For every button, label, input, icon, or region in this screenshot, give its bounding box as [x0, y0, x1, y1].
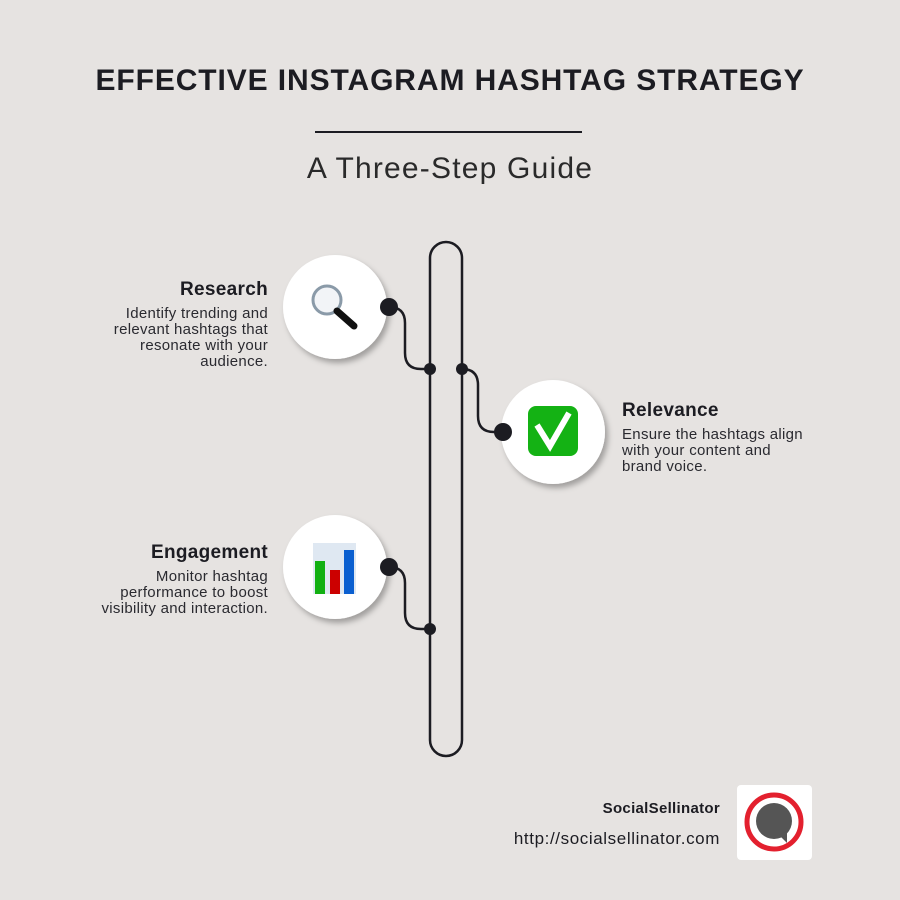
- text: engagement: visibility and interaction.: [101, 600, 268, 617]
- text: research: Identify trending and: [126, 305, 268, 322]
- text: engagement: Engagement: [151, 542, 268, 563]
- text: research: Research: [180, 279, 268, 300]
- node: relevance: [456, 363, 605, 484]
- text: relevance: Ensure the hashtags align: [622, 426, 803, 443]
- text: relevance: [622, 400, 803, 475]
- node: research: [283, 255, 436, 375]
- text: research: [114, 279, 268, 370]
- text: relevance: brand voice.: [622, 458, 707, 475]
- title: EFFECTIVE INSTAGRAM HASHTAG STRATEGY: [95, 64, 805, 97]
- subtitle: A Three-Step Guide: [307, 152, 593, 185]
- footer brand: SocialSellinator: [603, 800, 720, 817]
- text: research: relevant hashtags that: [114, 321, 268, 338]
- footer brand: http://socialsellinator.com: [514, 829, 720, 848]
- logo: [737, 785, 812, 860]
- text: research: resonate with your: [140, 337, 268, 354]
- text: relevance: Relevance: [622, 400, 719, 421]
- text: relevance: with your content and: [622, 442, 771, 459]
- text: engagement: [101, 542, 268, 617]
- node: engagement: [283, 515, 436, 635]
- text: engagement: performance to boost: [120, 584, 268, 601]
- footer brand: [514, 800, 720, 848]
- text: engagement: Monitor hashtag: [156, 568, 268, 585]
- text: research: audience.: [200, 353, 268, 370]
